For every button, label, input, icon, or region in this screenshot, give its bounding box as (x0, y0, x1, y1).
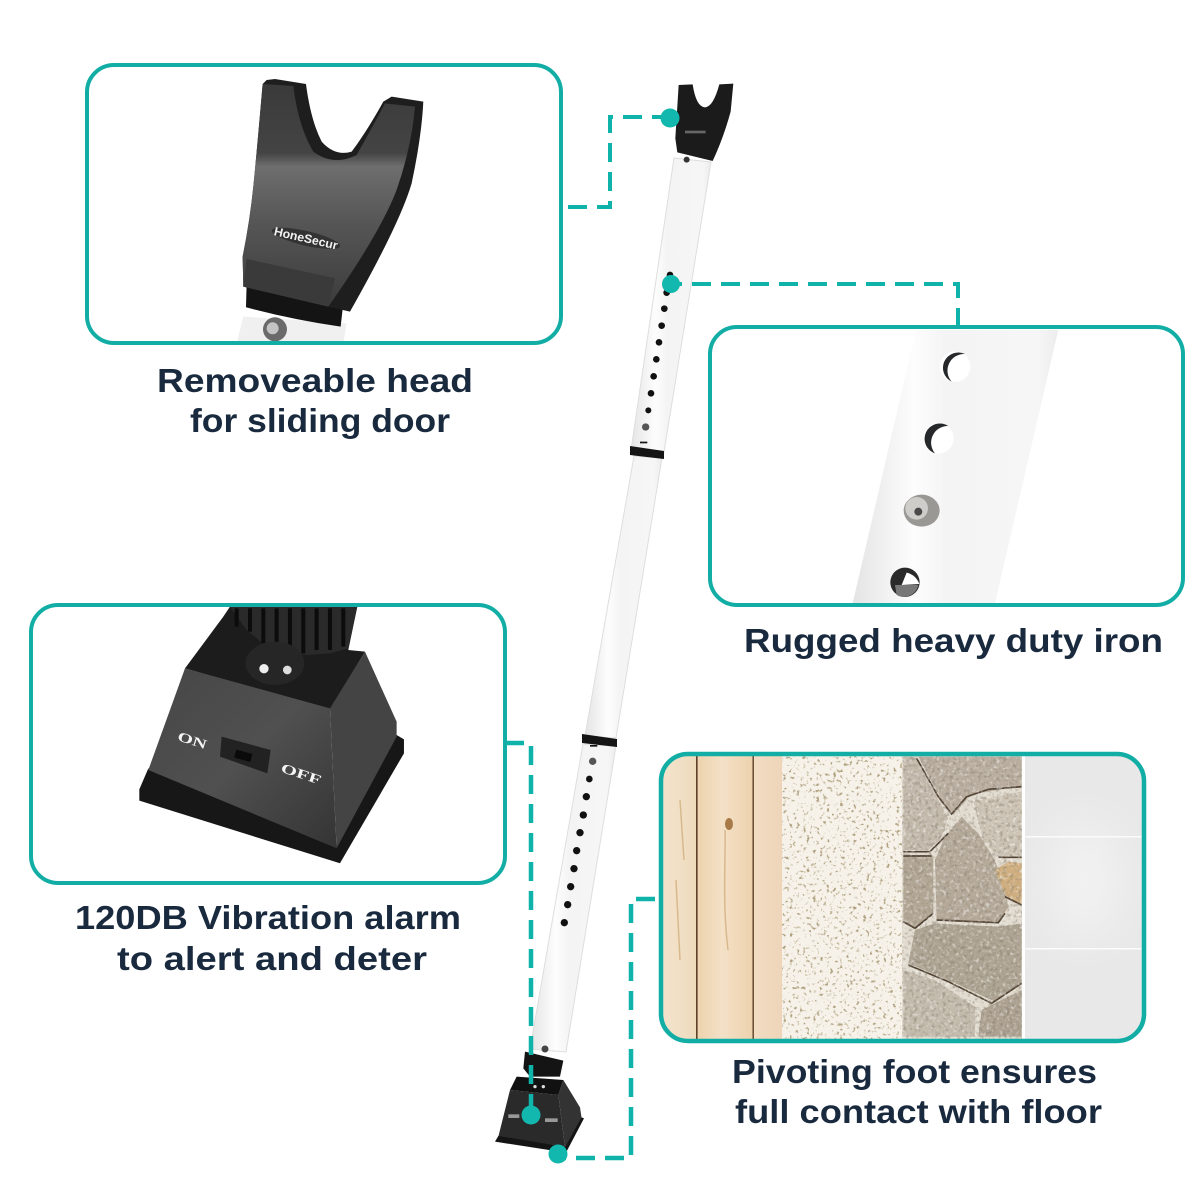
connector: iron tube to panel (662, 275, 958, 327)
caption: removable head (157, 362, 473, 439)
caption: floor contact: full contact with floor (735, 1093, 1102, 1130)
pole base screw (542, 1046, 548, 1052)
lower adjustment holes (561, 745, 597, 926)
pole: upper collar ring (630, 446, 664, 459)
upper adjustment holes (640, 272, 673, 443)
panel border (87, 65, 561, 343)
panel border (661, 754, 1144, 1041)
panel: floor surfaces (661, 754, 1144, 1041)
photo: four floor textures (663, 756, 1142, 1041)
pole: lower collar ring (582, 734, 617, 747)
small pivoting foot (495, 1052, 584, 1153)
caption: rugged iron: Rugged heavy duty iron (744, 622, 1163, 659)
photo: tube close-up with holes (853, 330, 1058, 603)
panel: rugged iron tube (710, 327, 1183, 605)
connector: removable head to panel (568, 108, 680, 207)
connector: alarm to panel (505, 743, 540, 1124)
caption: removable head: Removeable head (157, 362, 473, 399)
small removable head (675, 84, 733, 163)
connector: pivoting foot to panel (548, 899, 655, 1164)
photo: black U-shaped head (237, 79, 423, 343)
screw (904, 495, 940, 527)
pole: middle section (585, 456, 662, 738)
hole 4 (890, 568, 920, 597)
panel: vibration alarm (31, 605, 505, 883)
hole 2 (923, 423, 954, 454)
panel border (31, 605, 505, 883)
texture: stucco (782, 756, 902, 1041)
photo: alarm base with switch: ON (176, 729, 209, 752)
texture: wood (663, 756, 782, 1041)
panel: removable head (87, 65, 561, 343)
caption: floor contact (732, 1053, 1102, 1130)
caption: vibration alarm: to alert and deter (117, 940, 427, 977)
texture: stone (902, 756, 1022, 1041)
caption: removable head: for sliding door (190, 402, 450, 439)
texture: marble tile (1022, 756, 1142, 1041)
caption: vibration alarm (75, 899, 461, 977)
caption: vibration alarm: 120DB Vibration alarm (75, 899, 461, 936)
pole: lower section (530, 744, 616, 1052)
photo: alarm base with switch (139, 607, 404, 863)
panel border (710, 327, 1183, 605)
hole 1 (940, 351, 970, 382)
photo: alarm base with switch: OFF (279, 760, 323, 787)
pole: upper section (631, 158, 711, 452)
caption: floor contact: Pivoting foot ensures (732, 1053, 1097, 1090)
central door security bar product (495, 84, 733, 1153)
photo: black U-shaped head: HoneSecur (273, 224, 339, 253)
